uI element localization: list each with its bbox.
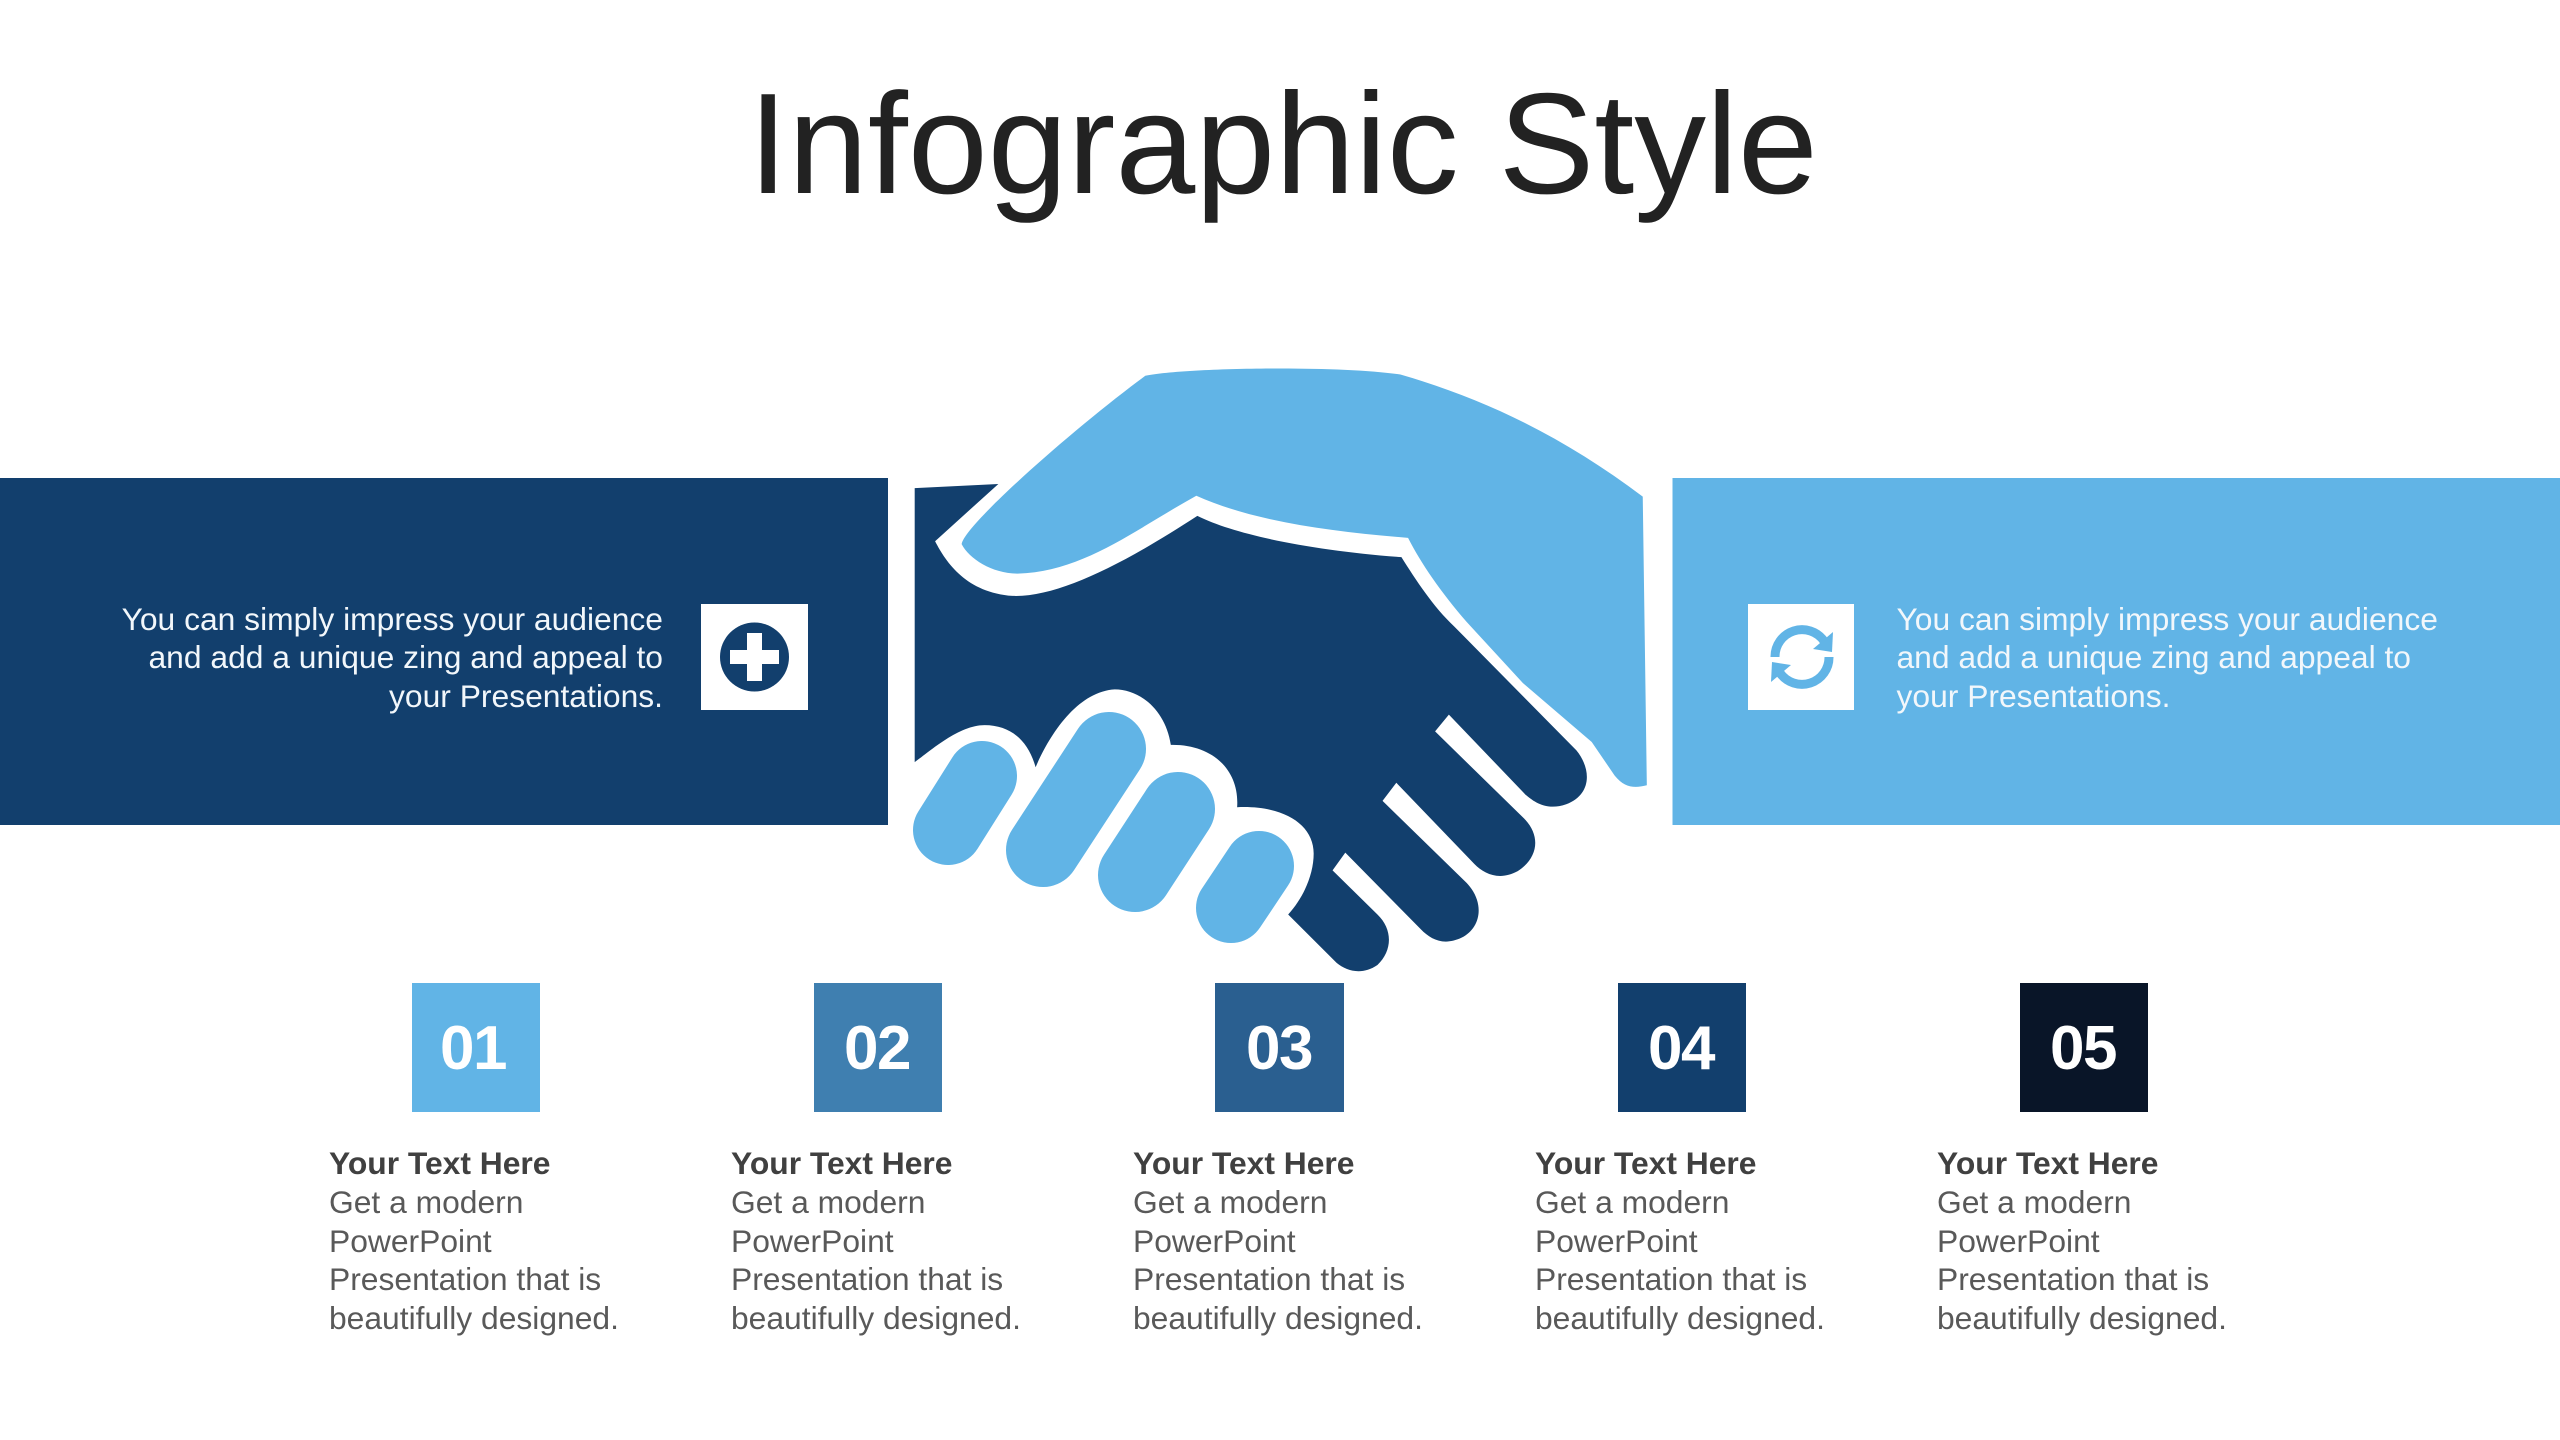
left banner text: your Presentations.	[389, 678, 663, 714]
panel: right light banner	[1672, 478, 2560, 825]
column 03	[1133, 983, 1423, 1336]
body 05: Presentation that is	[1937, 1261, 2209, 1297]
number badge 05	[2020, 983, 2148, 1112]
number 01: 01	[440, 1014, 506, 1083]
body 01: Get a modern	[329, 1184, 523, 1220]
body 01: Presentation that is	[329, 1261, 601, 1297]
number 04: 04	[1648, 1014, 1716, 1083]
column 04	[1535, 983, 1825, 1336]
column 02	[731, 983, 1021, 1336]
title: Infographic Style	[748, 64, 1818, 224]
body 04: Presentation that is	[1535, 1261, 1807, 1297]
body 04: PowerPoint	[1535, 1223, 1698, 1259]
number badge 01	[412, 983, 540, 1112]
column 05	[1937, 983, 2227, 1336]
dark hand	[915, 484, 1587, 971]
icon: plus in circle	[701, 604, 808, 710]
heading 02: Your Text Here	[731, 1145, 952, 1181]
icon: refresh arrows	[1748, 604, 1854, 710]
heading 04: Your Text Here	[1535, 1145, 1756, 1181]
heading 03: Your Text Here	[1133, 1145, 1354, 1181]
light hand	[962, 368, 1647, 787]
body 02: Get a modern	[731, 1184, 925, 1220]
heading 05: Your Text Here	[1937, 1145, 2158, 1181]
number 05: 05	[2050, 1014, 2116, 1083]
handshake illustration	[915, 368, 1647, 971]
left banner text: You can simply impress your audience	[122, 601, 663, 637]
panel: left dark banner	[0, 478, 888, 825]
body 04: beautifully designed.	[1535, 1300, 1825, 1336]
right banner text: You can simply impress your audience	[1896, 601, 2438, 637]
body 05: beautifully designed.	[1937, 1300, 2227, 1336]
body 02: Presentation that is	[731, 1261, 1003, 1297]
fingers	[948, 749, 1259, 908]
right banner text: your Presentations.	[1896, 678, 2170, 714]
body 05: PowerPoint	[1937, 1223, 2100, 1259]
body 03: PowerPoint	[1133, 1223, 1296, 1259]
column 01	[329, 983, 619, 1336]
body 01: PowerPoint	[329, 1223, 492, 1259]
right banner text: and add a unique zing and appeal to	[1896, 639, 2411, 675]
number badge 04	[1618, 983, 1746, 1112]
body 04: Get a modern	[1535, 1184, 1729, 1220]
body 01: beautifully designed.	[329, 1300, 619, 1336]
body 02: PowerPoint	[731, 1223, 894, 1259]
body 03: beautifully designed.	[1133, 1300, 1423, 1336]
left banner text: and add a unique zing and appeal to	[148, 639, 663, 675]
number 02: 02	[844, 1014, 910, 1083]
body 02: beautifully designed.	[731, 1300, 1021, 1336]
number badge 02	[814, 983, 942, 1112]
body 03: Get a modern	[1133, 1184, 1327, 1220]
number badge 03	[1215, 983, 1344, 1112]
number 03: 03	[1246, 1014, 1312, 1083]
heading 01: Your Text Here	[329, 1145, 550, 1181]
body 05: Get a modern	[1937, 1184, 2131, 1220]
body 03: Presentation that is	[1133, 1261, 1405, 1297]
